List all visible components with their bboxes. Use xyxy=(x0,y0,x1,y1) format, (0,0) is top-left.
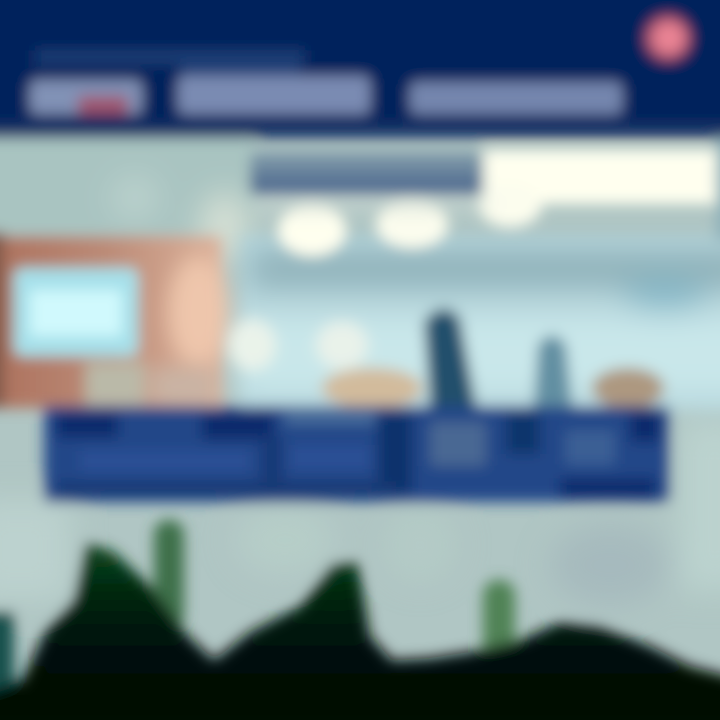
icon: red badge xyxy=(646,16,690,60)
panel: navy info bar xyxy=(44,406,670,502)
wall below info bar xyxy=(0,420,720,605)
panel: upper photo band xyxy=(0,128,720,410)
header bar xyxy=(0,0,720,138)
pill label (illegible in reference) xyxy=(250,152,482,194)
title (illegible in reference) xyxy=(30,62,622,114)
foreground plants xyxy=(0,520,720,720)
figures and desks xyxy=(228,309,664,408)
panel: brown wall with screen xyxy=(0,232,228,408)
subtitle (illegible in reference) xyxy=(35,50,305,64)
icon: wall screen xyxy=(14,268,138,356)
